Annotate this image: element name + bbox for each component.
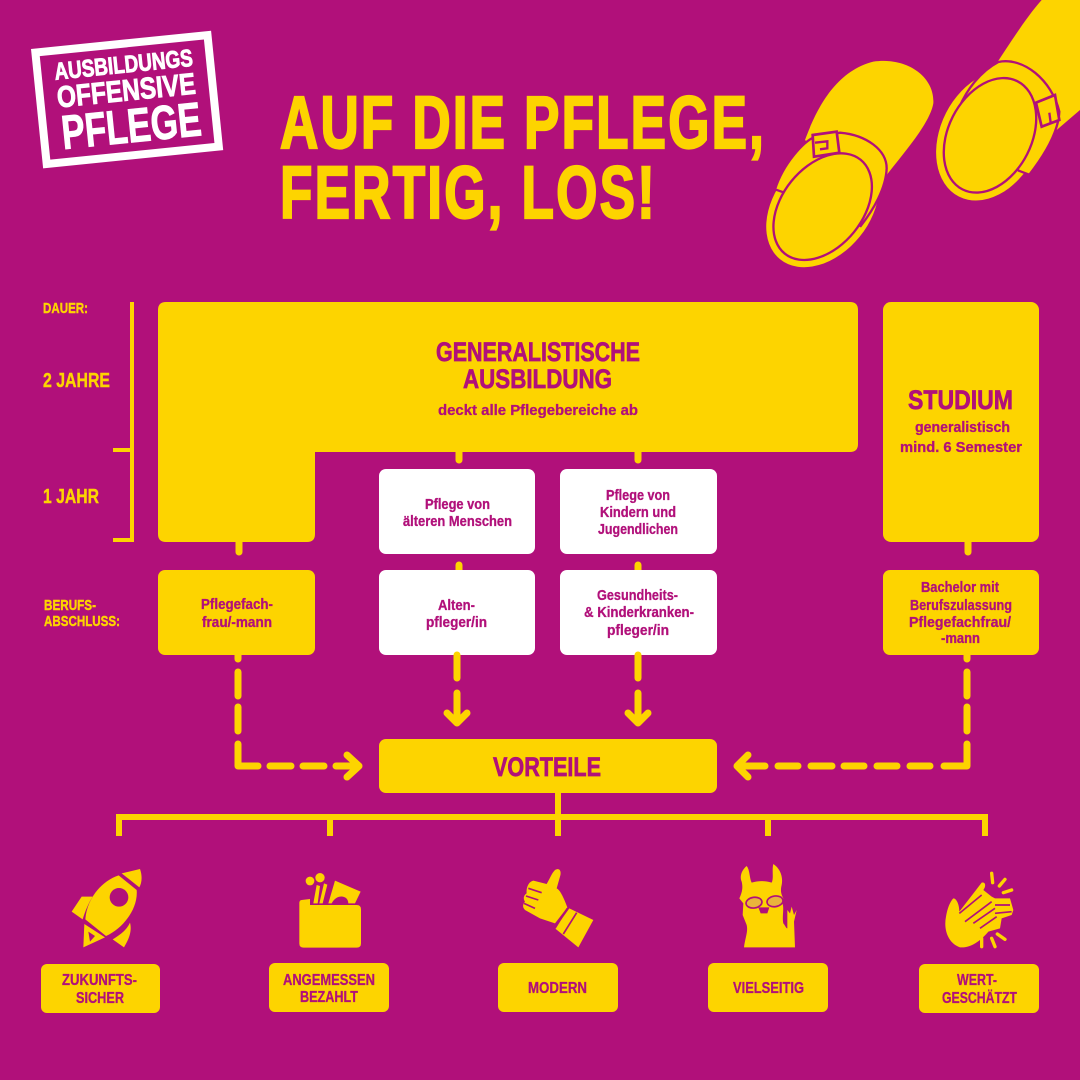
duration scale: 1 JAHR xyxy=(43,486,99,508)
label: Berufsabschluss xyxy=(44,598,120,630)
label: wertgeschätzt: WERT- xyxy=(957,972,997,989)
icon: thumbs up xyxy=(523,869,593,947)
box: Altenpfleger/in: Alten- xyxy=(438,598,475,614)
box: Pflegefachfrau/-mann: frau/-mann xyxy=(202,615,272,631)
arrow: Kinderkrankenpfleger to Vorteile xyxy=(628,655,648,723)
logo: Ausbildungsoffensive Pflege stamp xyxy=(35,35,219,164)
icon: clapping hands xyxy=(945,873,1013,947)
label: zukunftssicher: ZUKUNFTS- xyxy=(62,972,137,989)
box: Altenpfleger/in: pfleger/in xyxy=(426,615,487,631)
logo: Ausbildungsoffensive Pflege stamp: OFFENSIVE xyxy=(55,68,197,115)
label: angemessen bezahlt: BEZAHLT xyxy=(300,989,358,1006)
box: Pflegefachfrau/-mann xyxy=(158,570,315,655)
label: wertgeschätzt xyxy=(919,964,1039,1013)
label: wertgeschätzt: GESCHÄTZT xyxy=(942,989,1017,1007)
title: AUF DIE PFLEGE, xyxy=(280,81,766,164)
box: Gesundheits- und Kinderkrankenpfleger/in: Gesundheits- xyxy=(597,588,678,604)
label: angemessen bezahlt: ANGEMESSEN xyxy=(283,972,375,989)
label: zukunftssicher: SICHER xyxy=(76,990,124,1007)
tree connector xyxy=(119,793,985,836)
box: Pflege von Kindern und Jugendlichen: Kindern und xyxy=(600,505,676,521)
arrow: right path to Vorteile xyxy=(737,655,967,777)
box: Vorteile: VORTEILE xyxy=(493,752,601,782)
label: modern xyxy=(498,963,618,1012)
logo: Ausbildungsoffensive Pflege stamp: AUSBILDUNGS xyxy=(53,45,194,86)
label: vielseitig: VIELSEITIG xyxy=(733,980,804,997)
label: Berufsabschluss: BERUFS- xyxy=(44,598,96,614)
label: angemessen bezahlt xyxy=(269,963,389,1012)
title: FERTIG, LOS! xyxy=(280,151,657,234)
panel: generalistische Ausbildung: AUSBILDUNG xyxy=(463,364,612,394)
box: Pflege von Kindern und Jugendlichen: Pflege von xyxy=(606,488,670,504)
box: Pflege von älteren Menschen: Pflege von xyxy=(425,497,490,513)
icon: sandals and feet xyxy=(743,0,1080,289)
box: Bachelor mit Berufszulassung: Berufszulassung xyxy=(910,598,1012,614)
box: Pflege von Kindern und Jugendlichen: Jugendlichen xyxy=(598,522,678,538)
duration scale xyxy=(43,300,132,540)
label: vielseitig xyxy=(708,963,828,1012)
box: Altenpfleger/in xyxy=(379,570,535,655)
box: Gesundheits- und Kinderkrankenpfleger/in: & Kinderkranken- xyxy=(584,605,694,621)
icon: rocket xyxy=(72,869,142,947)
connectors xyxy=(239,450,968,570)
box: Pflegefachfrau/-mann: Pflegefach- xyxy=(201,597,273,613)
box: Bachelor mit Berufszulassung xyxy=(883,570,1039,655)
panel: Studium: STUDIUM xyxy=(908,385,1013,415)
box: Pflege von älteren Menschen: älteren Menschen xyxy=(403,514,512,530)
box: Pflege von älteren Menschen xyxy=(379,469,535,554)
panel: Studium xyxy=(883,302,1039,542)
label: Berufsabschluss: ABSCHLUSS: xyxy=(44,614,120,630)
logo: Ausbildungsoffensive Pflege stamp: PFLEGE xyxy=(59,93,204,160)
arrow: Altenpfleger to Vorteile xyxy=(447,655,467,723)
label: modern: MODERN xyxy=(528,980,587,997)
duration scale: DAUER: xyxy=(43,300,88,317)
box: Gesundheits- und Kinderkrankenpfleger/in: pfleger/in xyxy=(607,623,669,639)
duration scale: 2 JAHRE xyxy=(43,370,110,392)
box: Bachelor mit Berufszulassung: Bachelor mit xyxy=(921,580,999,596)
panel: generalistische Ausbildung: deckt alle Pflegebereiche ab xyxy=(438,402,638,419)
box: Gesundheits- und Kinderkrankenpfleger/in xyxy=(560,570,717,655)
label: zukunftssicher xyxy=(41,964,160,1013)
arrow: left path to Vorteile xyxy=(238,655,359,777)
panel: Studium: mind. 6 Semester xyxy=(900,439,1022,456)
box: Pflege von Kindern und Jugendlichen xyxy=(560,469,717,554)
box: Bachelor mit Berufszulassung: -mann xyxy=(941,631,980,647)
panel: generalistische Ausbildung: GENERALISTISCHE xyxy=(436,337,640,367)
icon: wallet with money xyxy=(299,873,361,948)
box: Bachelor mit Berufszulassung: Pflegefachfrau/ xyxy=(909,615,1011,631)
box: Vorteile xyxy=(379,739,717,793)
panel: generalistische Ausbildung xyxy=(158,302,858,542)
icon: llama with sunglasses xyxy=(739,864,797,947)
panel: Studium: generalistisch xyxy=(915,419,1010,436)
title xyxy=(280,81,766,234)
